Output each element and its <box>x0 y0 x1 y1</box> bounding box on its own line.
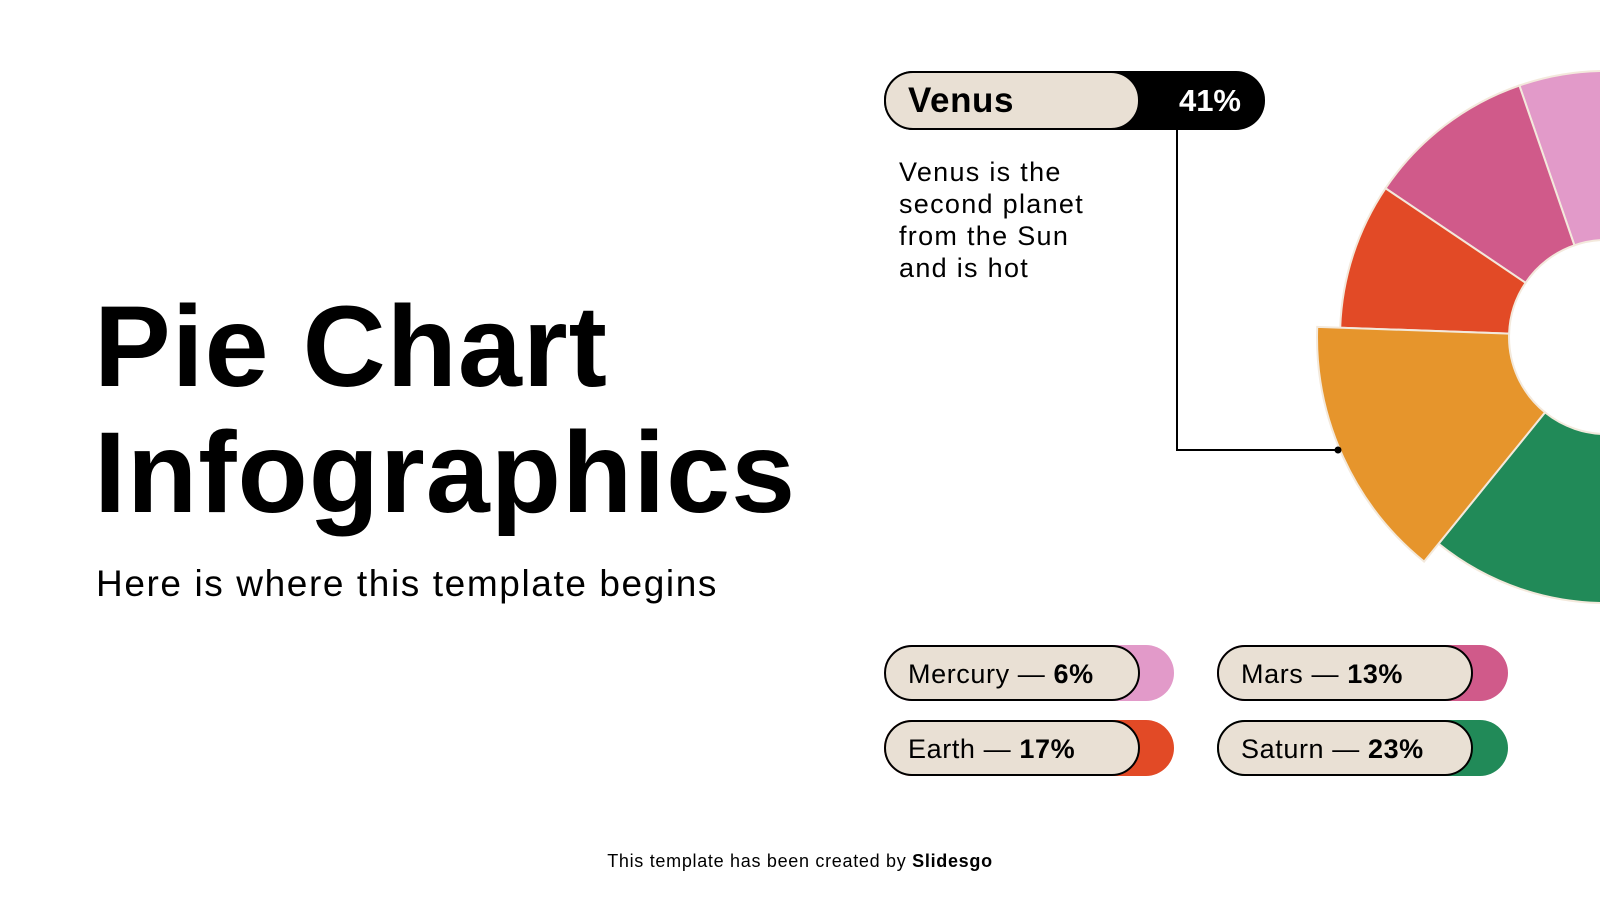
title: Infographics <box>94 409 796 537</box>
venus description: second planet <box>899 189 1084 219</box>
legend: mars <box>1217 645 1508 701</box>
legend: saturn: Saturn — 23% <box>1241 734 1424 764</box>
venus label pill: 41% <box>1179 83 1241 118</box>
footer: This template has been created by Slidesgo <box>607 851 993 871</box>
venus description: Venus is the <box>899 157 1062 187</box>
venus description: from the Sun <box>899 221 1069 251</box>
venus label pill <box>884 71 1265 130</box>
legend: earth <box>884 720 1174 776</box>
venus label pill: Venus <box>908 81 1014 120</box>
title <box>94 283 796 537</box>
slice: mercury <box>1519 71 1600 253</box>
slice: mars <box>1386 86 1574 283</box>
slice: venus <box>1317 327 1545 562</box>
subtitle: Here is where this template begins <box>96 563 718 604</box>
legend: mercury: Mercury — 6% <box>908 659 1094 689</box>
legend: earth: Earth — 17% <box>908 734 1075 764</box>
title: Pie Chart <box>94 283 608 411</box>
legend: saturn <box>1217 720 1508 776</box>
slice: earth <box>1340 188 1526 334</box>
venus description: and is hot <box>899 253 1029 283</box>
venus description <box>899 157 1084 283</box>
legend: mercury <box>884 645 1174 701</box>
legend: mars: Mars — 13% <box>1241 659 1403 689</box>
slice: saturn <box>1439 406 1600 603</box>
